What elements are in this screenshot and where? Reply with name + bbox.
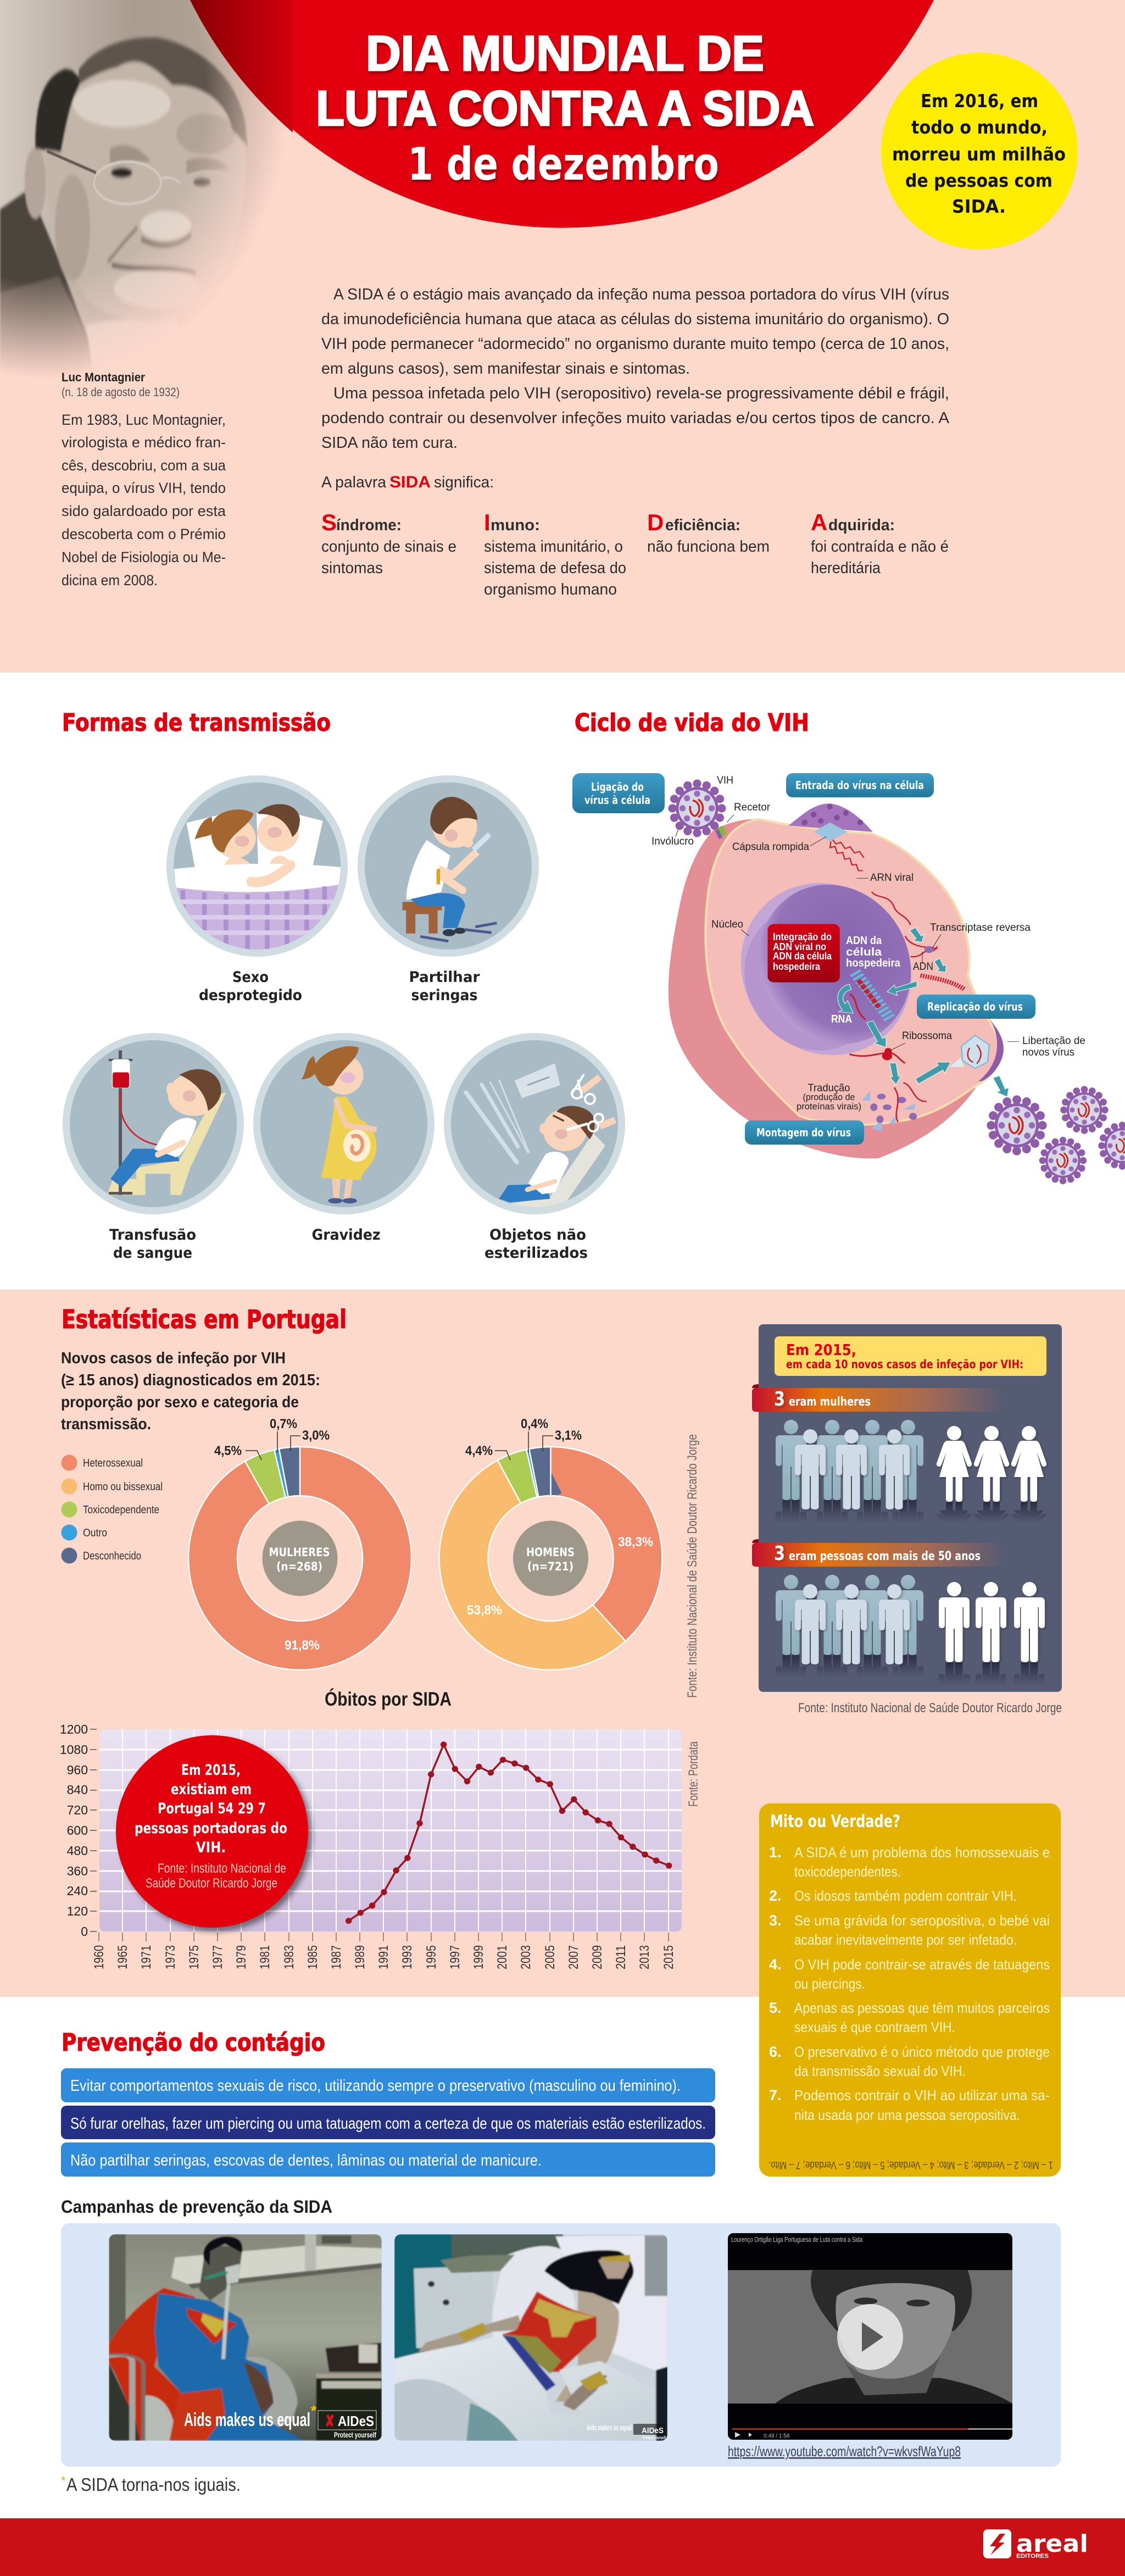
x axis: 2001: [495, 1945, 510, 1969]
label: Objetos não esterilizados: esterilizados: [484, 1245, 588, 1262]
SIDA meaning: Adquirida: A: [811, 509, 827, 535]
y axis: 1080: [60, 1742, 88, 1757]
callout: red circle 2015: existiam em: [171, 1781, 252, 1798]
x axis: 1971: [139, 1945, 154, 1969]
intro paragraph: A SIDA é o estágio mais avançado da infeção numa pessoa portadora do vírus VIH (vírus: [333, 286, 949, 303]
legend: Toxicodependente: [83, 1504, 159, 1516]
donut chart: mulheres: (n=268): [276, 1560, 322, 1573]
legend: Desconhecido: [83, 1550, 141, 1562]
x axis: 1960: [92, 1945, 107, 1969]
x axis: 1987: [329, 1945, 344, 1969]
item 7: Podemos contrair o VIH ao utilizar uma sa-: [794, 2087, 1050, 2103]
x axis: 1981: [258, 1945, 272, 1969]
diagram labels: Tradução: [807, 1082, 850, 1094]
y axis: 960: [67, 1763, 88, 1777]
biography text block: Nobel de Fisiologia ou Me-: [62, 549, 226, 565]
panel: campaigns: [61, 2223, 1061, 2467]
intro paragraph: em alguns casos), sem manifestar sinais e sintomas.: [321, 360, 690, 377]
callout: red circle 2015: VIH.: [196, 1839, 226, 1856]
panel: 10 new cases: [752, 1324, 1062, 1692]
photo: Luc Montagnier portrait: [0, 0, 279, 374]
yellow banner: Em 2015,: [786, 1341, 856, 1359]
nucleus: [721, 867, 932, 1071]
ribbon: 3 mais de 50 anos: [752, 1539, 1003, 1567]
intro paragraph: podendo contrair ou desenvolver infeções muito variadas e/ou certos tipos de cancro. A: [321, 409, 950, 427]
x axis: 2003: [519, 1945, 533, 1969]
label: Objetos não esterilizados: Objetos não: [489, 1226, 586, 1243]
intro paragraph: VIH pode permanecer “adormecido” no organismo durante muito tempo (cerca de 10 anos,: [321, 335, 949, 353]
label: Objetos não esterilizados: [484, 1226, 588, 1262]
y axis: [60, 1722, 97, 1939]
label: Transfusão de sangue: Transfusão: [109, 1226, 196, 1243]
x axis: 1985: [305, 1945, 320, 1969]
photo: Superman campaign: [109, 2234, 382, 2441]
campaign slogan small: AIDeS: [642, 2426, 664, 2435]
y axis: 720: [67, 1803, 88, 1817]
diagram labels: novos vírus: [1022, 1047, 1074, 1058]
item 6: da transmissão sexual do VIH.: [794, 2063, 966, 2079]
item 1: A SIDA é um problema dos homossexuais e: [794, 1844, 1050, 1861]
subheading: new cases: transmissão.: [61, 1415, 151, 1433]
prevention bar 3: Não partilhar seringas, escovas de dentes, lâminas ou material de manicure.: [70, 2152, 542, 2169]
diagram labels: hospedeira: [846, 957, 901, 969]
donut chart: mulheres: 91,8%: [285, 1638, 320, 1653]
intro paragraph: da imunodeficiência humana que ataca as células do sistema imunitário do organismo). O: [321, 310, 949, 328]
prevention bar 2: Só furar orelhas, fazer um piercing ou uma tatuagem com a certeza de que os materiais estão esterilizados.: [70, 2115, 706, 2133]
biography text block: [62, 370, 226, 589]
people row: over 50: [776, 1575, 1045, 1685]
diagram labels: Invólucro: [651, 836, 694, 847]
leader lines: [676, 814, 1019, 1051]
heading: Formas de transmissão: Formas de transmissão: [62, 709, 331, 737]
item 7: nita usada por uma pessoa seropositiva.: [794, 2107, 1020, 2123]
item 7: 7.: [769, 2087, 782, 2103]
SIDA meaning: Síndrome: índrome:: [336, 517, 402, 534]
SIDA meaning: Imuno: organismo humano: [484, 581, 617, 598]
SIDA meaning: Imuno: [484, 509, 626, 598]
donut chart: homens: 3,1%: [555, 1428, 582, 1443]
y axis: 480: [67, 1844, 88, 1858]
donut chart: homens: 4,4%: [465, 1444, 493, 1458]
x axis: 2009: [590, 1945, 605, 1969]
SIDA meaning: Adquirida: [811, 509, 949, 577]
SIDA meaning: Síndrome: [321, 509, 456, 577]
item 5: 5.: [769, 2000, 782, 2016]
DNA: [855, 972, 890, 1019]
title: [316, 26, 814, 191]
item 4: [769, 1956, 1050, 1992]
biography text block: cês, descobriu, com a sua: [62, 457, 226, 474]
virus particles: [668, 779, 726, 837]
item 4: O VIH pode contrair-se através de tatuagens: [794, 1956, 1050, 1973]
intro paragraph: Uma pessoa infetada pelo VIH (seropositivo) revela-se progressivamente débil e frágil,: [333, 385, 949, 402]
item 5: [769, 2000, 1050, 2035]
diagram labels: Transcriptase reversa: [930, 922, 1031, 934]
item 5: sexuais é que contraem VIH.: [794, 2019, 955, 2035]
legend: Homo ou bissexual: [83, 1481, 163, 1493]
diagram labels: ADN da célula: [773, 951, 832, 962]
callout: yellow circle: [881, 53, 1078, 249]
item 4: 4.: [769, 1956, 782, 1973]
item 5: Apenas as pessoas que têm muitos parceiros: [794, 2000, 1050, 2016]
item 1: [769, 1844, 1050, 1880]
SIDA meaning: Imuno: sistema de defesa do: [484, 559, 626, 577]
diagram labels: Núcleo: [711, 919, 743, 930]
cell: [669, 803, 1019, 1158]
SIDA meaning: Síndrome: conjunto de sinais e: [321, 538, 456, 556]
donut chart: homens: 53,8%: [467, 1603, 502, 1618]
x axis: 2013: [637, 1945, 652, 1969]
x axis: 2007: [566, 1945, 581, 1969]
campaign slogan: AIDeS: [338, 2413, 374, 2429]
upside-down answers: 1 – Mito; 2 – Verdade; 3 – Mito; 4 – Verdade; 5 – Mito; 6 – Verdade; 7 – Mito.: [768, 2159, 1053, 2170]
prevention bar 1: Evitar comportamentos sexuais de risco, utilizando sempre o preservativo (masculino ou feminino).: [70, 2077, 681, 2095]
biography text block: sido galardoado por esta: [62, 503, 226, 519]
campaign slogan: Aids makes us equal: [184, 2410, 310, 2430]
y axis: 1200: [60, 1722, 88, 1736]
legend: [62, 1455, 163, 1564]
item 6: O preservativo é o único método que protege: [794, 2044, 1050, 2060]
donut chart: mulheres: [188, 1417, 411, 1670]
heading: Ciclo de vida do VIH: Ciclo de vida do VIH: [575, 709, 809, 737]
label: Sexo desprotegido: desprotegido: [199, 987, 302, 1004]
source note vertical: Fonte: Instituto Nacional de Saúde Doutor Ricardo Jorge: [685, 1434, 700, 1698]
people row: women: [776, 1420, 1046, 1523]
diagram labels: célula: [846, 946, 882, 958]
y axis: 840: [67, 1783, 88, 1797]
label box: Montagem do vírus: [745, 1120, 864, 1145]
prevention bar 3: [61, 2142, 715, 2177]
callout: yellow circle: de pessoas com: [905, 170, 1052, 191]
icon: objetos não esterilizados: [444, 1033, 625, 1216]
SIDA meaning: Síndrome: S: [321, 509, 337, 535]
title: DIA MUNDIAL DE: [366, 26, 764, 81]
y axis: 240: [67, 1884, 88, 1898]
biography text block: Luc Montagnier: [62, 370, 145, 384]
y axis: 0: [81, 1924, 88, 1939]
diagram labels: ADN viral no: [773, 941, 826, 952]
label box: Ligação do vírus à célula: [572, 773, 665, 813]
biography text block: virologista e médico fran-: [62, 434, 226, 451]
x axis: 1975: [187, 1945, 202, 1969]
diagram labels: VIH: [717, 775, 733, 786]
data line: [346, 1741, 672, 1924]
donut chart: mulheres: 0,7%: [270, 1417, 297, 1431]
prevention bar 1: [61, 2068, 715, 2102]
label: Sexo desprotegido: Sexo: [232, 969, 269, 986]
arrows: [838, 928, 1009, 1097]
callout: yellow circle: Em 2016, em: [921, 90, 1038, 112]
item 3: Se uma grávida for seropositiva, o bebé vai: [794, 1912, 1050, 1929]
SIDA meaning: Imuno: sistema imunitário, o: [484, 538, 623, 556]
source note: Fonte: Instituto Nacional de Saúde Doutor Ricardo Jorge: [798, 1701, 1062, 1716]
SIDA meaning: Imuno: muno:: [491, 517, 540, 534]
item 2: 2.: [769, 1887, 782, 1904]
callout: yellow circle: morreu um milhão: [892, 143, 1066, 165]
title: LUTA CONTRA A SIDA: [316, 81, 814, 136]
ribbon: 3 mulheres: [752, 1384, 1003, 1412]
ribbon: 3 mulheres: 3: [774, 1388, 785, 1411]
label box: Replicação do vírus: [917, 995, 1035, 1019]
diagram labels: (produção de: [803, 1092, 855, 1102]
diagram: HIV life cycle: [572, 773, 1125, 1184]
proteins: [862, 1091, 916, 1131]
logo: Areal Editores: EDITORES: [1016, 2553, 1049, 2560]
donut chart: mulheres: 4,5%: [214, 1444, 242, 1458]
campaign slogan: *: [311, 2402, 317, 2419]
SIDA meaning: Adquirida: hereditária: [811, 559, 881, 577]
biography text block: dicina em 2008.: [62, 572, 158, 589]
label box: Montagem do vírus: Montagem do vírus: [756, 1126, 851, 1139]
heading: Prevenção do contágio: Prevenção do contágio: [62, 2029, 325, 2057]
logo: Areal Editores: areal: [1016, 2530, 1088, 2558]
label box: Entrada do vírus na célula: [786, 773, 934, 797]
subheading: new cases: (≥ 15 anos) diagnosticados em 2015:: [61, 1372, 320, 1389]
x axis: 2005: [543, 1945, 558, 1969]
diagram labels: Recetor: [734, 802, 771, 813]
prevention bar 2: [61, 2106, 715, 2139]
SIDA meaning: Imuno: I: [484, 509, 491, 535]
x axis: 2011: [614, 1945, 628, 1969]
SIDA meaning: Síndrome: sintomas: [321, 559, 383, 577]
diagram labels: Ribossoma: [902, 1030, 952, 1042]
item 3: acabar inevitavelmente por ser infetado.: [794, 1931, 1017, 1948]
yellow banner: [775, 1336, 1046, 1376]
diagram labels: [651, 775, 1085, 1112]
ribbon: 3 mais de 50 anos: eram pessoas com mais de 50 anos: [789, 1550, 981, 1563]
diagram labels: Libertação de: [1022, 1035, 1085, 1047]
y axis: 120: [67, 1904, 88, 1918]
title: 1 de dezembro: [408, 138, 719, 191]
video player: Lourenço Ortigão Liga Portuguesa de Luta contra a Sida: [731, 2235, 863, 2244]
diagram labels: ARN viral: [870, 872, 914, 884]
donut chart: mulheres: MULHERES: [269, 1546, 330, 1559]
red box: [768, 924, 840, 982]
label: Transfusão de sangue: [109, 1226, 196, 1262]
campaign slogan: [184, 2402, 376, 2439]
play button: [837, 2304, 903, 2370]
icon: partilhar seringas: [358, 775, 539, 957]
x axis: 1999: [471, 1945, 486, 1969]
footnote: A SIDA torna-nos iguais.: [66, 2474, 241, 2495]
video player: [728, 2233, 1012, 2440]
campaign slogan small: [587, 2423, 666, 2440]
item 6: 6.: [769, 2044, 782, 2060]
x axis: 1991: [376, 1945, 391, 1969]
footnote: *: [61, 2474, 66, 2488]
line chart: deaths: [60, 1722, 682, 1969]
label box: Ligação do vírus à célula: vírus à célula: [584, 793, 650, 807]
label box: Replicação do vírus: Replicação do vírus: [927, 1000, 1023, 1013]
callout: red circle 2015: Fonte: Instituto Nacional de: [158, 1861, 286, 1876]
SIDA meaning intro: [321, 473, 494, 491]
item 2: Os idosos também podem contrair VIH.: [794, 1887, 1017, 1904]
callout: yellow circle: todo o mundo,: [911, 116, 1048, 138]
item 7: [769, 2087, 1050, 2123]
budding viruses: [788, 803, 873, 832]
biography text block: equipa, o vírus VIH, tendo: [62, 480, 226, 496]
SIDA meaning intro: significa:: [434, 474, 494, 491]
campaign slogan small: Aids makes us equal: [587, 2423, 632, 2433]
biography text block: descoberta com o Prémio: [62, 526, 226, 542]
SIDA meaning: Deficiência: não funciona bem: [647, 538, 770, 556]
subheading: new cases: Novos casos de infeção por VIH: [61, 1350, 286, 1367]
SIDA meaning: Deficiência: D: [647, 509, 664, 535]
donut chart: homens: 0,4%: [521, 1417, 548, 1431]
subheading: campaigns: Campanhas de prevenção da SIDA: [61, 2197, 332, 2217]
subheading: new cases: proporção por sexo e categoria de: [61, 1394, 299, 1411]
diagram labels: ADN: [913, 961, 933, 973]
logo: Areal Editores: [983, 2529, 1088, 2560]
x axis: 1973: [163, 1945, 178, 1969]
callout: red circle 2015: Saúde Doutor Ricardo Jorge: [146, 1876, 277, 1891]
diagram labels: proteínas virais): [797, 1101, 861, 1112]
x axis: 2015: [661, 1945, 676, 1969]
item 3: [769, 1912, 1050, 1948]
SIDA meaning intro: SIDA: [389, 473, 431, 491]
label: Gravidez: Gravidez: [312, 1226, 380, 1243]
intro paragraph: [321, 286, 950, 452]
ribosome: [849, 1053, 905, 1063]
diagram labels: Cápsula rompida: [732, 841, 809, 853]
x axis: 1965: [115, 1945, 130, 1969]
diagram labels: RNA: [831, 1013, 852, 1025]
legend: Heterossexual: [83, 1457, 143, 1469]
x axis: 1995: [424, 1945, 439, 1969]
header red semicircle with title: [190, 0, 934, 228]
diagram labels: Integração do: [773, 931, 832, 942]
callout: red circle 2015: pessoas portadoras do: [135, 1820, 287, 1837]
photo: Wonder Woman campaign: [394, 2234, 668, 2441]
panel: Mito ou Verdade: Mito ou Verdade?: [770, 1812, 900, 1831]
biography text block: Em 1983, Luc Montagnier,: [62, 412, 226, 428]
item 6: [769, 2044, 1050, 2079]
heading: Estatísticas em Portugal: Estatísticas em Portugal: [62, 1304, 347, 1334]
intro paragraph: SIDA não tem cura.: [321, 434, 458, 452]
ribbon: 3 mulheres: eram mulheres: [789, 1395, 871, 1409]
callout: red circle 2015: [116, 1735, 308, 1928]
x axis: 1989: [353, 1945, 367, 1969]
campaign slogan: Protect yourself: [334, 2430, 376, 2439]
x axis: 1983: [282, 1945, 297, 1969]
item 3: 3.: [769, 1912, 782, 1929]
donut chart: homens: HOMENS: [526, 1546, 575, 1559]
campaign slogan small: Protect yourself: [643, 2435, 666, 2440]
label: Sexo desprotegido: [199, 969, 302, 1004]
background: statistics band: [0, 1290, 1125, 1997]
donut chart: homens: 38,3%: [618, 1535, 653, 1550]
label: Partilhar seringas: [409, 969, 480, 1004]
donut chart: homens: [439, 1417, 662, 1670]
legend: Outro: [83, 1527, 107, 1539]
yellow banner: em cada 10 novos casos de infeção por VIH:: [786, 1358, 1023, 1371]
label: Partilhar seringas: Partilhar: [409, 969, 480, 986]
SIDA meaning: Deficiência: [647, 509, 770, 556]
background: header band: [0, 0, 1125, 673]
x axis: 1977: [210, 1945, 225, 1969]
chart title: Óbitos por SIDA: [325, 1688, 452, 1710]
callout: yellow circle: SIDA.: [952, 196, 1006, 217]
ribbon: 3 mais de 50 anos: 3: [774, 1542, 785, 1565]
SIDA meaning: Deficiência: eficiência:: [665, 517, 740, 534]
diagram labels: hospedeira: [773, 961, 821, 972]
icon: gravidez: [253, 1033, 435, 1214]
label box: Ligação do vírus à célula: Ligação do: [591, 780, 644, 793]
footer band: [0, 2518, 1125, 2576]
x axis: 1993: [400, 1945, 415, 1969]
item 1: 1.: [769, 1844, 782, 1861]
panel: Mito ou Verdade: [759, 1803, 1061, 2177]
label box: Entrada do vírus na célula: Entrada do vírus na célula: [795, 779, 924, 792]
SIDA meaning intro: A palavra: [321, 474, 387, 491]
item 1: toxicodependentes.: [794, 1863, 901, 1880]
label: Transfusão de sangue: de sangue: [113, 1245, 192, 1262]
SIDA meaning: Adquirida: foi contraída e não é: [811, 538, 949, 556]
biography text block: (n. 18 de agosto de 1932): [62, 385, 180, 399]
SIDA meaning: Adquirida: dquirida:: [828, 517, 895, 534]
video player: 0:49 / 1:58: [764, 2433, 790, 2439]
label: Partilhar seringas: seringas: [411, 987, 478, 1004]
source note: Pordata: Fonte: Pordata: [686, 1741, 701, 1807]
callout: red circle 2015: Portugal 54 29 7: [158, 1800, 266, 1817]
donut chart: mulheres: 3,0%: [302, 1428, 330, 1443]
item 4: ou piercings.: [794, 1975, 865, 1992]
subheading: new cases: [61, 1350, 320, 1433]
icon: transfusão de sangue: [63, 1033, 244, 1214]
x axis: 1979: [234, 1945, 249, 1969]
donut chart: homens: (n=721): [527, 1560, 573, 1573]
callout: red circle 2015: Em 2015,: [181, 1762, 241, 1779]
diagram labels: ADN da: [846, 935, 882, 947]
video link: https://www.youtube.com/watch?v=wkvsfWaYup8: [728, 2443, 961, 2460]
viral RNA: [830, 838, 864, 871]
y axis: 360: [67, 1864, 88, 1878]
y axis: 600: [67, 1823, 88, 1837]
x axis: [92, 1933, 676, 1969]
x axis: 1997: [448, 1945, 463, 1969]
icon: sexo desprotegido: [166, 775, 348, 968]
